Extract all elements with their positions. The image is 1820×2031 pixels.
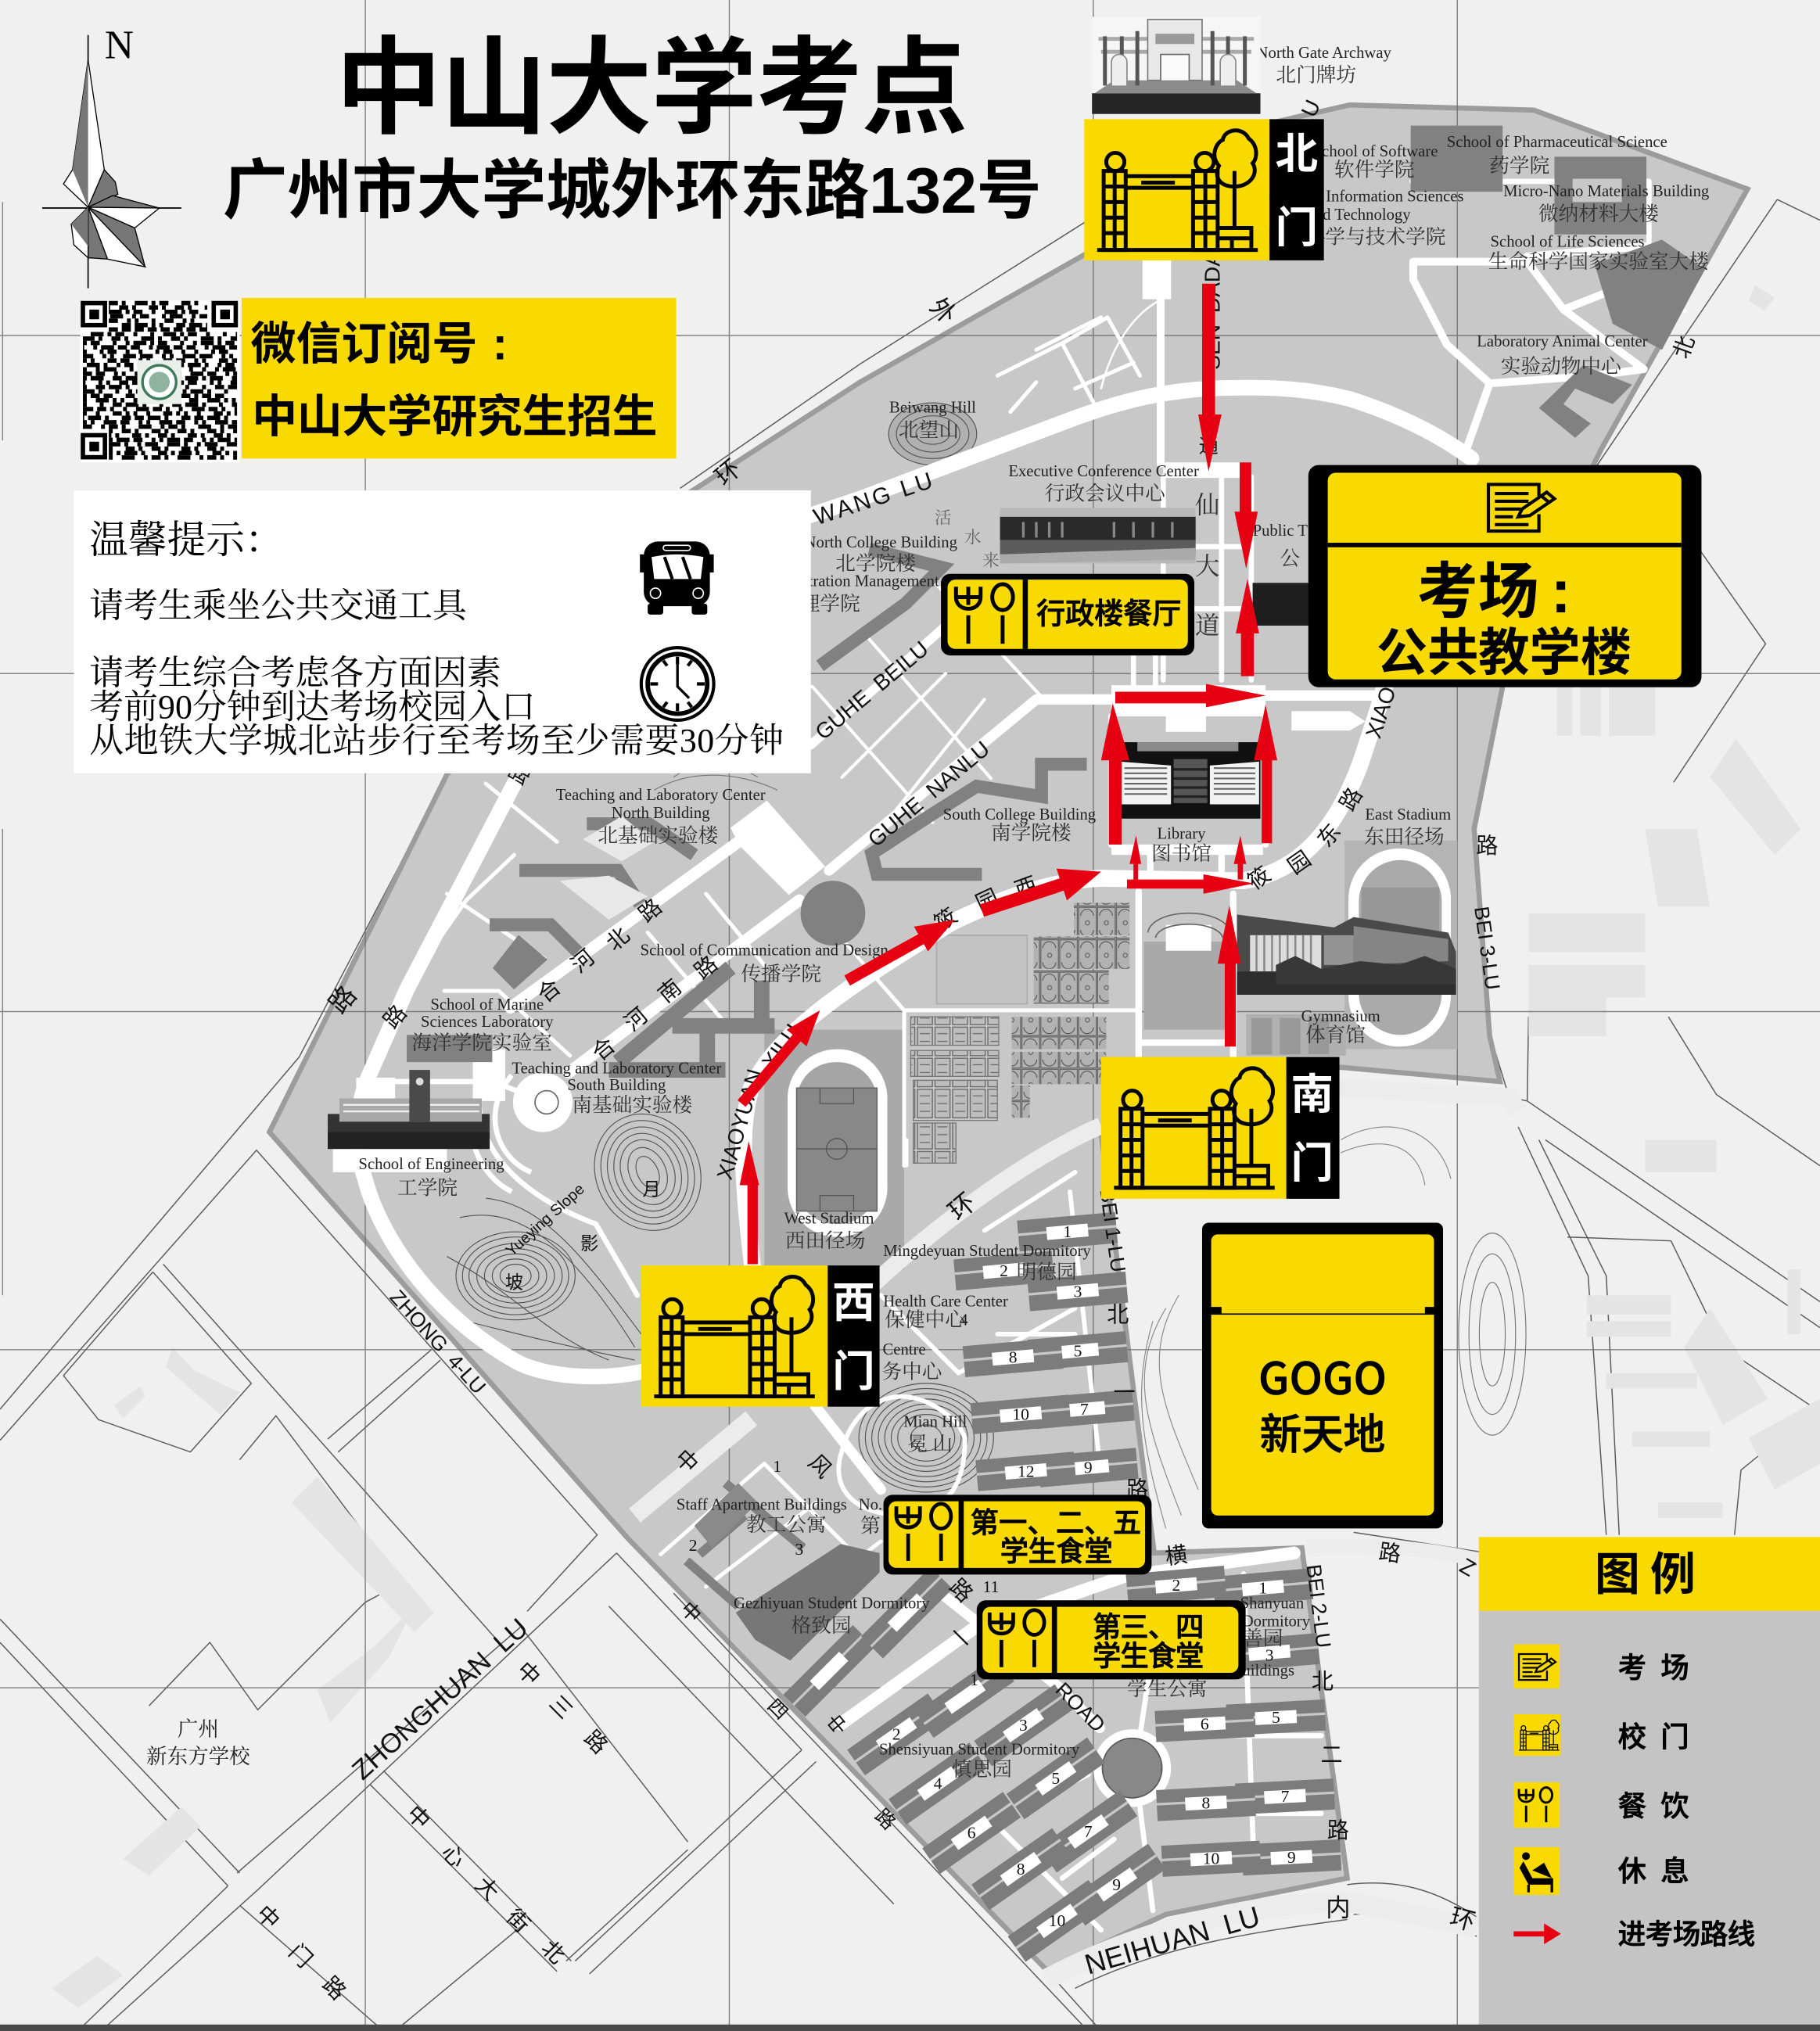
building labels: 10 bbox=[1012, 1405, 1029, 1424]
school of engineering labels: 工学院 bbox=[397, 1176, 458, 1199]
road labels: 路 bbox=[1476, 834, 1498, 858]
road labels: 风 bbox=[803, 1450, 836, 1483]
building labels: Centre bbox=[882, 1341, 926, 1358]
campus white roads bbox=[357, 181, 1684, 1930]
road labels: 中 bbox=[670, 1444, 703, 1477]
road labels: ZHONGHUAN LU bbox=[346, 1613, 534, 1785]
south gate label bbox=[1291, 1071, 1334, 1187]
building labels: 9 bbox=[1084, 1459, 1093, 1477]
road labels: 中 bbox=[402, 1801, 435, 1834]
road labels: 道 bbox=[1195, 612, 1219, 639]
canteen sign: canteens 3 4 bbox=[977, 1600, 1246, 1679]
building labels: 行政会议中心 bbox=[1045, 483, 1166, 505]
photo: school of engineering bbox=[328, 1070, 490, 1172]
road labels: 合 bbox=[533, 974, 565, 1007]
light outside road strips bbox=[635, 1088, 1518, 1979]
building labels: 学生公寓 bbox=[1127, 1678, 1208, 1700]
building labels: School of Communication and Design bbox=[641, 942, 888, 960]
building labels: Gymnasium bbox=[1301, 1008, 1380, 1025]
building labels: 11 bbox=[983, 1577, 999, 1596]
building labels: School of Software bbox=[1313, 143, 1438, 160]
photo: north gate archway bbox=[1092, 17, 1261, 114]
road labels: BEI 3-LU bbox=[1470, 905, 1505, 992]
road labels: 路 bbox=[580, 1726, 612, 1759]
road labels: 影 bbox=[580, 1233, 598, 1254]
arrow: small left bbox=[1129, 835, 1141, 880]
building labels: 北望山 bbox=[899, 418, 959, 441]
canteen sign: canteens 1 2 5: 第一、二、五 bbox=[971, 1500, 1141, 1541]
building labels: 9 bbox=[1112, 1875, 1121, 1894]
legend heading: 图 例 bbox=[1595, 1550, 1696, 1600]
building labels: 北基础实验楼 bbox=[598, 824, 719, 847]
road labels: 中 bbox=[252, 1900, 285, 1933]
compass: N bbox=[105, 23, 134, 67]
road labels: 路 bbox=[945, 1574, 978, 1607]
road labels: ZHONG 4-LU bbox=[386, 1286, 490, 1398]
building labels: Mian Hill bbox=[903, 1414, 967, 1431]
building labels: North Building bbox=[612, 805, 710, 822]
road labels: 路 bbox=[690, 951, 722, 984]
building labels: 保健中心 bbox=[885, 1308, 966, 1331]
building labels: 北门牌坊 bbox=[1276, 64, 1356, 87]
bottom edge bar bbox=[0, 2025, 1820, 2031]
legend icon: rest bbox=[1513, 1847, 1560, 1895]
legend icon: route arrow bbox=[1513, 1924, 1561, 1944]
road labels: 路 bbox=[504, 758, 537, 789]
building labels: 2 bbox=[1000, 1261, 1008, 1280]
GOGO sign: GOGO bbox=[1258, 1344, 1387, 1407]
south gate marker bbox=[1101, 1057, 1340, 1199]
road labels: 活 bbox=[935, 508, 951, 528]
road labels: 内 bbox=[1326, 1894, 1351, 1922]
road labels: 合 bbox=[587, 1033, 620, 1065]
road labels: 路 bbox=[1327, 1818, 1349, 1843]
building labels: 3 bbox=[1265, 1646, 1273, 1665]
building labels: 慎思园 bbox=[952, 1758, 1012, 1781]
building labels: 6 bbox=[967, 1824, 976, 1843]
exam venue sign bbox=[1308, 465, 1701, 687]
building labels: 实验动物中心 bbox=[1501, 355, 1622, 378]
road labels: Yueying Slope bbox=[503, 1181, 588, 1260]
dormitory blocks bbox=[695, 1212, 1341, 1962]
canteen sign: canteens 3 4: 学生食堂 bbox=[1093, 1634, 1204, 1674]
building labels: 8 bbox=[1017, 1860, 1025, 1878]
building labels: 8 bbox=[1009, 1348, 1018, 1367]
building labels: 东田径场 bbox=[1364, 825, 1445, 848]
west gate label bbox=[832, 1279, 875, 1395]
tips panel bbox=[74, 490, 811, 773]
building labels: 1 bbox=[970, 1670, 978, 1689]
south gate label: 门 bbox=[1291, 1139, 1334, 1187]
building labels: 微纳材料大楼 bbox=[1538, 203, 1659, 225]
venue text: 考场 bbox=[1417, 558, 1539, 626]
building labels: 5 bbox=[1272, 1708, 1280, 1727]
building labels: 南基础实验楼 bbox=[572, 1093, 693, 1116]
legend label: dining: 餐 饮 bbox=[1618, 1784, 1689, 1825]
west gate label: 门 bbox=[832, 1347, 875, 1395]
tips text: 从地铁大学城北站步行至考场至少需要30分钟 bbox=[89, 722, 784, 759]
building labels: North College Building bbox=[805, 534, 957, 551]
arrow: plaza east bbox=[1115, 684, 1265, 707]
building labels: Teaching and Laboratory Center bbox=[512, 1060, 721, 1077]
north gate label: 北 bbox=[1276, 131, 1318, 178]
building labels: 5 bbox=[1051, 1769, 1060, 1788]
tips text bbox=[89, 587, 784, 759]
road labels: 街 bbox=[502, 1904, 534, 1937]
building labels: 8 bbox=[1202, 1794, 1210, 1813]
arrow: west gate north bbox=[740, 1141, 759, 1264]
road labels: WANG LU bbox=[810, 467, 939, 530]
building labels: Administration Management bbox=[752, 573, 939, 590]
building labels: 务中心 bbox=[882, 1360, 943, 1383]
road labels: GUHE BEILU bbox=[810, 637, 933, 745]
legend label: rest: 休 息 bbox=[1618, 1849, 1689, 1889]
building labels: 图书馆 bbox=[1151, 842, 1212, 865]
icon: cutlery bbox=[896, 1504, 951, 1561]
road labels: LU bbox=[1291, 96, 1325, 132]
road labels: 环 bbox=[943, 1188, 982, 1226]
icon: gate bbox=[654, 1277, 815, 1396]
building labels: 7 bbox=[1281, 1787, 1290, 1806]
canteen sign: administration building: 行政楼餐厅 bbox=[1036, 590, 1181, 633]
WeChat account box: 中山大学研究生招生 bbox=[252, 392, 658, 442]
building labels: School of Information Sciences bbox=[1259, 188, 1464, 206]
road labels: BEI 2-LU bbox=[1302, 1563, 1335, 1649]
building labels: 广州 bbox=[178, 1717, 219, 1741]
building labels: East Stadium bbox=[1365, 806, 1451, 824]
WeChat account box: 微信订阅号 bbox=[250, 320, 477, 370]
road labels: 水 bbox=[964, 528, 982, 547]
arrow: xiaoyuan road segment 3 bbox=[738, 1010, 820, 1107]
venue text: 公共教学楼 bbox=[1377, 624, 1632, 681]
icon: gate bbox=[1097, 131, 1258, 250]
building labels: 南学院楼 bbox=[991, 821, 1072, 844]
road labels: 环 bbox=[1447, 1904, 1478, 1936]
photo: public teaching building bbox=[1253, 583, 1315, 626]
building labels: 4 bbox=[934, 1774, 942, 1793]
icon: cutlery bbox=[989, 1610, 1044, 1667]
road labels: 中 bbox=[676, 1598, 705, 1627]
building labels: 格致园 bbox=[792, 1614, 852, 1637]
road labels: NEIHUAN LU bbox=[1081, 1900, 1263, 1981]
building labels: 新东方学校 bbox=[146, 1745, 251, 1768]
building labels: 12 bbox=[1018, 1462, 1034, 1481]
tips text: 考前90分钟到达考场校园入口 bbox=[89, 688, 536, 726]
road labels: 北 bbox=[1669, 332, 1699, 361]
road labels bbox=[252, 96, 1699, 2004]
building labels: 5 bbox=[1074, 1341, 1082, 1360]
GOGO sign: 新天地 bbox=[1260, 1401, 1385, 1462]
dark buildings bbox=[407, 126, 1705, 1660]
building labels: 善园 bbox=[1243, 1627, 1283, 1650]
west gate label: 西 bbox=[832, 1279, 875, 1327]
legend label: gate: 校 门 bbox=[1618, 1715, 1689, 1756]
arrow: library road east bbox=[1127, 874, 1254, 894]
venue text: : bbox=[1551, 558, 1571, 626]
road labels: 河 bbox=[619, 1003, 652, 1035]
arrow: small right bbox=[1234, 835, 1246, 880]
legend icon: exam venue bbox=[1513, 1645, 1560, 1688]
road labels: 中 bbox=[824, 1710, 853, 1739]
building labels: 体育馆 bbox=[1305, 1024, 1366, 1046]
road labels: 北 bbox=[1107, 1303, 1129, 1327]
road labels: 心 bbox=[437, 1839, 470, 1872]
building labels: Health Care Center bbox=[883, 1294, 1008, 1311]
building labels: 信息科学与技术学院 bbox=[1265, 226, 1445, 249]
building labels: Micro-Nano Materials Building bbox=[1503, 183, 1709, 200]
building labels: 10 bbox=[1049, 1911, 1065, 1930]
building labels: 4 bbox=[960, 1311, 968, 1329]
road labels: 路 bbox=[871, 1805, 899, 1834]
south gate label: 南 bbox=[1291, 1071, 1334, 1118]
WeChat account box bbox=[242, 298, 677, 458]
WeChat QR code bbox=[81, 300, 239, 462]
road labels: 三 bbox=[544, 1691, 577, 1724]
road labels: 来 bbox=[982, 551, 1000, 570]
stadium surrounds and sports fields bbox=[764, 841, 1457, 1269]
road labels: 路 bbox=[1377, 1540, 1402, 1566]
tips text: 请考生综合考虑各方面因素 bbox=[89, 654, 501, 692]
photo: executive conference center bbox=[1000, 508, 1196, 563]
GOGO sign bbox=[1202, 1223, 1443, 1528]
building labels: North Gate Archway bbox=[1257, 45, 1392, 62]
building labels: 西田径场 bbox=[785, 1229, 865, 1252]
WeChat account box: : bbox=[493, 320, 508, 370]
building labels: 2 bbox=[689, 1536, 697, 1555]
road labels: ROAD bbox=[1051, 1678, 1110, 1737]
road labels: XILU bbox=[757, 1020, 805, 1074]
school of engineering labels: School of Engineering bbox=[358, 1156, 504, 1173]
building labels: and Technology bbox=[1308, 206, 1411, 224]
road labels: SEN bbox=[1201, 325, 1225, 370]
north gate marker bbox=[1084, 119, 1324, 260]
road labels: Z bbox=[1456, 1553, 1480, 1581]
building labels: 3 bbox=[1074, 1282, 1082, 1301]
road labels: 北 bbox=[1312, 1669, 1334, 1693]
plazas and circles bbox=[356, 685, 1366, 1807]
building labels: 公 bbox=[1280, 547, 1300, 569]
north gate label: 门 bbox=[1276, 204, 1318, 252]
road labels: 路 bbox=[318, 1972, 350, 2004]
arrow: xiaoyuan road segment 1 bbox=[845, 920, 955, 985]
tips heading: 温馨提示： bbox=[89, 519, 284, 562]
building labels: 9 bbox=[1287, 1848, 1296, 1867]
road labels: 二 bbox=[1321, 1743, 1343, 1767]
road labels: 筱 bbox=[1243, 862, 1275, 895]
school of engineering labels bbox=[358, 1156, 504, 1199]
arrow: xiaoyuan road segment 2 bbox=[980, 869, 1101, 917]
road labels: 月 bbox=[642, 1179, 661, 1199]
icon: gate bbox=[1114, 1068, 1275, 1188]
road labels: 筱 bbox=[930, 903, 961, 936]
building labels: Teaching and Laboratory Center bbox=[556, 787, 766, 804]
icon: bus bbox=[640, 541, 714, 615]
icon: exam paper bbox=[1488, 484, 1554, 531]
building labels: 6 bbox=[1201, 1714, 1209, 1733]
building labels: 药学院 bbox=[1489, 154, 1549, 178]
photo: library bbox=[1121, 742, 1261, 819]
building labels: School of Pharmaceutical Science bbox=[1447, 134, 1667, 151]
legend label: exam venue: 考 场 bbox=[1618, 1645, 1689, 1686]
icon: cutlery bbox=[956, 584, 1013, 644]
building labels: Beiwang Hill bbox=[889, 400, 976, 417]
north gate label bbox=[1276, 131, 1318, 252]
building labels: Laboratory Animal Center bbox=[1477, 333, 1648, 350]
road labels: 西 bbox=[1011, 872, 1040, 902]
route arrows bbox=[738, 284, 1277, 1264]
building labels: 1 bbox=[773, 1457, 781, 1476]
hill contours bbox=[447, 403, 1526, 1528]
building labels: 第 bbox=[860, 1515, 881, 1538]
legend panel bbox=[1479, 1537, 1820, 2026]
building labels: 3 bbox=[795, 1540, 803, 1559]
building labels: 7 bbox=[1080, 1400, 1089, 1419]
road labels: 北 bbox=[537, 1936, 569, 1968]
building labels: Executive Conference Center bbox=[1008, 463, 1199, 480]
arrow: south gate north bbox=[1218, 906, 1241, 1046]
building labels: 7 bbox=[1084, 1822, 1093, 1841]
building labels: 管理学院 bbox=[780, 592, 860, 615]
building labels: 冕 山 bbox=[907, 1433, 953, 1455]
legend label: route: 进考场路线 bbox=[1618, 1913, 1755, 1953]
arrow: north gate south bbox=[1198, 284, 1222, 472]
building labels: School of Marine bbox=[430, 996, 544, 1014]
building labels: Buildings bbox=[1232, 1663, 1294, 1680]
road labels: 园 bbox=[1283, 846, 1316, 879]
building labels: Mingdeyuan Student Dormitory bbox=[883, 1243, 1091, 1260]
road labels: 四 bbox=[763, 1695, 792, 1724]
building labels: South College Building bbox=[943, 806, 1096, 824]
building labels: Shanyuan bbox=[1240, 1595, 1305, 1612]
road labels: XIAO bbox=[1361, 684, 1401, 741]
road labels: 仙 bbox=[1195, 491, 1219, 519]
building labels bbox=[146, 45, 1709, 1930]
road labels: DADA bbox=[1201, 252, 1225, 313]
canteen sign: canteens 3 4: 第三、四 bbox=[1093, 1605, 1204, 1645]
road labels: 横 bbox=[1164, 1542, 1189, 1569]
building labels: Gezhiyuan Student Dormitory bbox=[734, 1595, 930, 1612]
road labels: 路 bbox=[1126, 1477, 1148, 1502]
building labels: 10 bbox=[1203, 1850, 1219, 1868]
building labels: Dormitory bbox=[1242, 1613, 1311, 1631]
road labels: 门 bbox=[284, 1939, 317, 1972]
building labels: School of Life Sciences bbox=[1491, 234, 1645, 251]
road labels: 大 bbox=[471, 1872, 504, 1905]
building labels: 生命科学国家实验室大楼 bbox=[1488, 250, 1709, 273]
canteen sign: canteens 1 2 5: 学生食堂 bbox=[1000, 1529, 1113, 1570]
photo: gymnasium bbox=[1237, 914, 1456, 995]
tips text: 请考生乘坐公共交通工具 bbox=[89, 587, 468, 625]
road labels: GUHE NANLU bbox=[863, 737, 994, 852]
road labels: 一 bbox=[1114, 1380, 1136, 1405]
legend icon: dining bbox=[1513, 1782, 1560, 1828]
road labels: 大 bbox=[1195, 552, 1219, 580]
arrow: plaza to teaching building bbox=[1236, 579, 1259, 676]
white courtyards bbox=[559, 816, 654, 920]
west gate marker bbox=[641, 1265, 880, 1407]
road labels: 通 bbox=[1199, 436, 1219, 458]
building labels: 软件学院 bbox=[1334, 158, 1415, 181]
building labels: 2 bbox=[892, 1725, 900, 1744]
building labels: 3 bbox=[1019, 1716, 1028, 1735]
road labels: 河 bbox=[567, 945, 599, 978]
road labels: 园 bbox=[972, 885, 1002, 916]
building labels: Staff Apartment Buildings bbox=[677, 1497, 847, 1514]
canteen sign: administration building bbox=[941, 574, 1194, 655]
building labels: 明德园 bbox=[1017, 1261, 1077, 1283]
canteen sign: canteens 1 2 5 bbox=[884, 1495, 1151, 1574]
building labels: 海洋学院实验室 bbox=[411, 1032, 552, 1054]
address subtitle: 广州市大学城外环东路132号 bbox=[223, 154, 1042, 227]
icon: clock bbox=[641, 648, 714, 720]
building labels: Library bbox=[1157, 826, 1206, 843]
road labels: 路 bbox=[379, 1000, 411, 1033]
legend icon: gate bbox=[1513, 1714, 1560, 1756]
building labels: South Building bbox=[567, 1077, 666, 1094]
arrow: right library north bbox=[1254, 705, 1277, 843]
building labels: Sciences Laboratory bbox=[421, 1014, 554, 1031]
building labels: Public T bbox=[1253, 522, 1308, 540]
road labels: 路 bbox=[1335, 784, 1367, 815]
building labels: 1 bbox=[1063, 1222, 1072, 1241]
campus ground bbox=[269, 105, 1747, 1970]
building labels: Shensiyuan Student Dormitory bbox=[879, 1742, 1080, 1759]
building labels: 传播学院 bbox=[741, 963, 821, 985]
arrow: east lane south bbox=[1234, 462, 1258, 569]
title: 中山大学考点 bbox=[336, 29, 967, 148]
building labels: 2 bbox=[1172, 1576, 1180, 1595]
compass bbox=[42, 23, 181, 289]
road labels: BEI 1-LU bbox=[1095, 1187, 1130, 1274]
venue text bbox=[1377, 558, 1632, 681]
road labels: 坡 bbox=[505, 1272, 523, 1293]
building labels: West Stadium bbox=[784, 1211, 874, 1228]
road labels: XIAOYUAN bbox=[713, 1066, 767, 1182]
road labels: 东 bbox=[1312, 820, 1345, 852]
road labels: 路 bbox=[324, 981, 363, 1019]
building labels: 北学院楼 bbox=[835, 552, 916, 575]
building labels: No. bbox=[859, 1497, 882, 1514]
road labels: 南 bbox=[654, 974, 686, 1007]
road labels: 北 bbox=[601, 923, 634, 956]
road labels: 中 bbox=[512, 1657, 545, 1690]
building labels: 1 bbox=[1258, 1579, 1267, 1598]
road labels: 一 bbox=[943, 1622, 976, 1655]
arrow: left library north bbox=[1101, 703, 1129, 845]
road labels: 外 bbox=[924, 292, 961, 329]
building labels: 教工公寓 bbox=[746, 1513, 827, 1536]
road labels: 路 bbox=[634, 894, 666, 927]
road labels: 环 bbox=[709, 454, 746, 491]
